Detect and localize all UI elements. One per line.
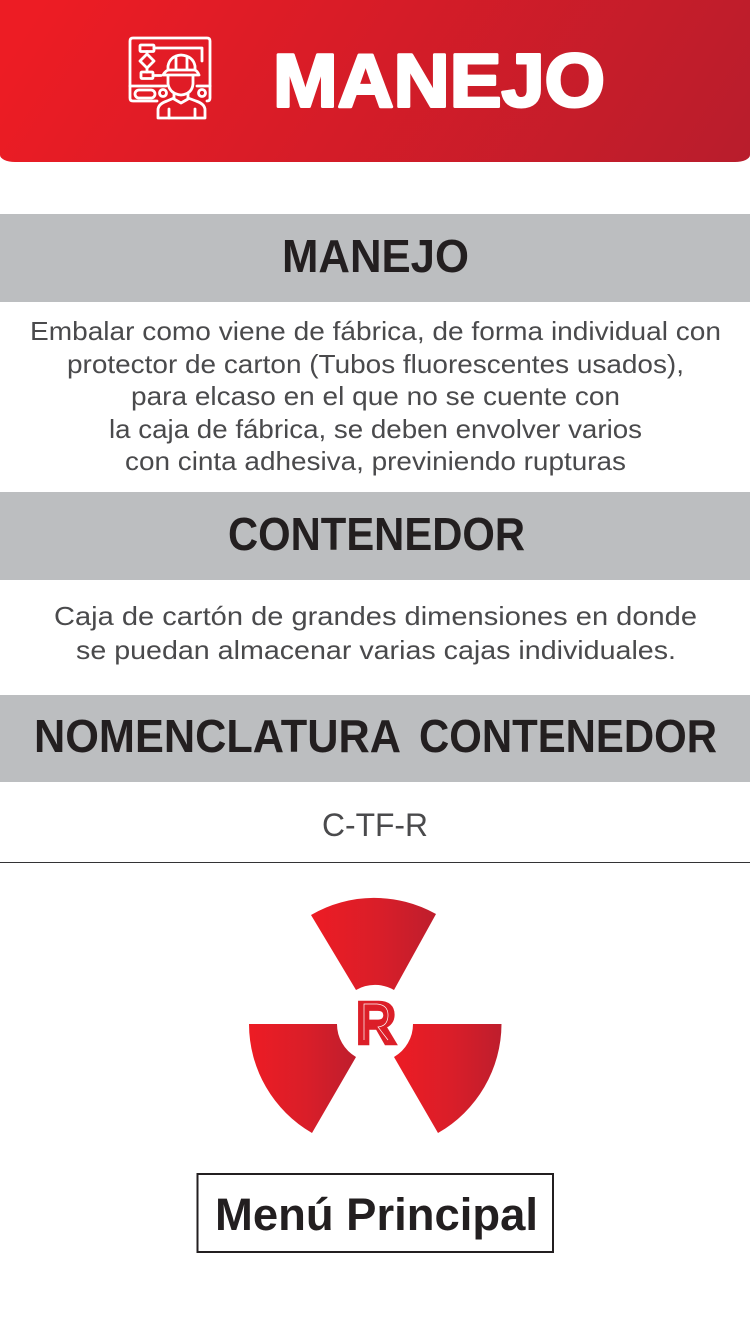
button: menu principal [198, 1174, 553, 1252]
panel: contenedor heading: CONTENEDOR [228, 508, 525, 560]
panel: nomenclatura heading: NOMENCLATURA [34, 710, 401, 762]
panel: nomenclatura heading: CONTENEDOR [419, 710, 717, 762]
text block: contenedor description: se puedan almacenar varias cajas individuales. [76, 635, 676, 665]
text block: manejo description: con cinta adhesiva, previniendo rupturas [125, 446, 626, 476]
title: MANEJO [273, 38, 605, 122]
text block: contenedor description: Caja de cartón de grandes dimensiones en donde [54, 601, 697, 631]
blade: left [249, 1024, 356, 1133]
icon: worker in front of flowchart monitor [130, 38, 210, 118]
icon: radiation symbol with R logo [249, 898, 502, 1133]
button: menu principal: Menú Principal [215, 1189, 538, 1240]
text block: manejo description: para elcaso en el que no se cuente con [131, 381, 620, 411]
text block: nomenclature code: C-TF-R [322, 807, 428, 843]
panel: manejo heading [0, 214, 750, 302]
header banner [0, 0, 750, 162]
text block: manejo description: Embalar como viene de fábrica, de forma individual con [30, 316, 721, 346]
text block: manejo description: la caja de fábrica, se deben envolver varios [109, 414, 642, 444]
panel: nomenclatura heading [0, 695, 750, 782]
blade: right [394, 1024, 502, 1133]
text block: manejo description: protector de carton (Tubos fluorescentes usados), [67, 349, 684, 379]
blade: top [311, 898, 436, 990]
logo letter R: R [356, 990, 396, 1056]
panel: manejo heading: MANEJO [282, 230, 469, 282]
text block: contenedor description [54, 601, 697, 665]
panel: contenedor heading [0, 492, 750, 580]
text block: manejo description [30, 316, 721, 476]
